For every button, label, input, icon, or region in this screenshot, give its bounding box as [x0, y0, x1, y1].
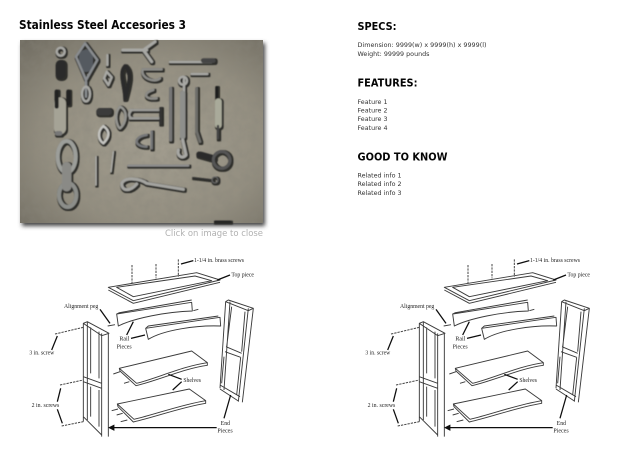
diagram: shelf assembly, right [365, 257, 590, 437]
text block: related info: Related info 3 [358, 189, 402, 197]
text block: feature list: Feature 4 [358, 124, 388, 132]
diagram: shelf assembly, right: Pieces [453, 344, 468, 351]
diagram: shelf assembly, right: Rail [455, 336, 466, 343]
title: Stainless Steel Accesories 3 [19, 18, 186, 32]
diagram: shelf assembly, left: Alignment peg [64, 303, 99, 310]
text block: related info [358, 172, 402, 197]
diagram: shelf assembly, right: 2 in. screws [368, 402, 396, 409]
heading: specs: SPECS: [358, 20, 396, 33]
diagram: shelf assembly, right: Shelves [519, 377, 537, 384]
diagram: shelf assembly, left: 3 in. screw [29, 349, 55, 356]
text block: feature list: Feature 2 [358, 106, 388, 114]
panel: features [358, 76, 418, 132]
diagram: shelf assembly, left [29, 257, 254, 437]
heading: good to know: GOOD TO KNOW [358, 150, 448, 164]
text block: specs details [358, 41, 486, 58]
diagram: shelf assembly, left: Top piece [231, 271, 254, 278]
text block: specs details: Weight: 99999 pounds [358, 50, 430, 58]
text block: specs details: Dimension: 9999(w) x 9999(h) x 9999(l) [358, 41, 486, 49]
text block: feature list: Feature 1 [358, 98, 388, 106]
diagram: shelf assembly, right: Alignment peg [400, 303, 435, 310]
heading: features: FEATURES: [358, 76, 418, 90]
text block: related info: Related info 1 [358, 172, 402, 180]
photo: stainless steel fittings [20, 40, 265, 226]
diagram: shelf assembly, left: 1-1/4 in. brass screws [194, 257, 244, 264]
diagram: shelf assembly, right: 1-1/4 in. brass screws [530, 257, 580, 264]
caption: close hint: Click on image to close [165, 229, 263, 239]
text block: feature list: Feature 3 [358, 115, 388, 123]
diagram: shelf assembly, left: Rail [119, 336, 130, 343]
diagram: shelf assembly, right: 3 in. screw [365, 349, 391, 356]
text block: related info: Related info 2 [358, 180, 402, 188]
diagram: shelf assembly, left: Shelves [183, 377, 201, 384]
diagram: shelf assembly, left: Pieces [217, 428, 233, 435]
diagram: shelf assembly, left: 2 in. screws [32, 402, 60, 409]
panel: specs [358, 20, 486, 58]
panel: good to know [358, 150, 448, 197]
text block: feature list [358, 98, 388, 132]
diagram: shelf assembly, left: End [221, 420, 231, 427]
diagram: shelf assembly, right: Pieces [553, 428, 569, 435]
diagram: shelf assembly, right: End [557, 420, 567, 427]
diagram: shelf assembly, right: Top piece [567, 271, 590, 278]
diagram: shelf assembly, left: Pieces [117, 344, 132, 351]
